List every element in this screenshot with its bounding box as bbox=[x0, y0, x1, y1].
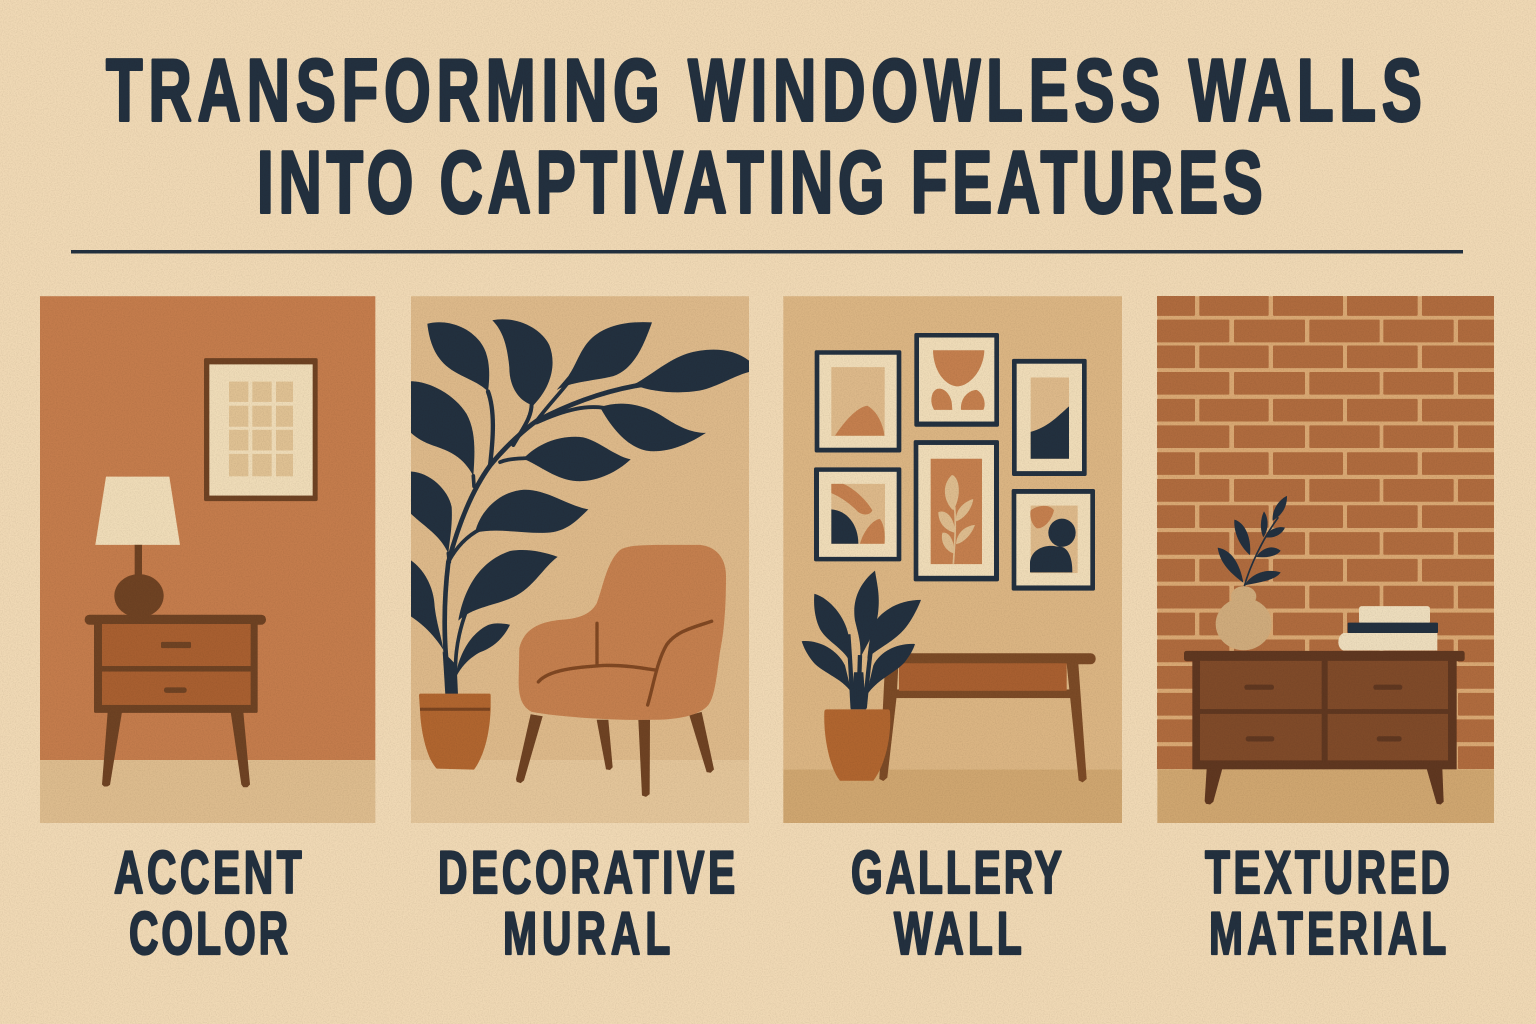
title: INTO CAPTIVATING FEATURES bbox=[257, 133, 1263, 231]
armchair bbox=[516, 545, 726, 797]
frame 2 bbox=[914, 333, 999, 427]
label: textured material: TEXTURED bbox=[1205, 839, 1450, 906]
frame 4 bbox=[814, 467, 901, 561]
nightstand bbox=[85, 615, 266, 787]
label: gallery wall: WALL bbox=[894, 900, 1022, 967]
label: textured material: MATERIAL bbox=[1209, 900, 1446, 967]
label: decorative mural: DECORATIVE bbox=[438, 839, 735, 906]
potted plant bbox=[802, 571, 921, 781]
panel: decorative mural bbox=[411, 296, 749, 824]
vase with branch bbox=[1216, 496, 1287, 650]
panel: gallery wall bbox=[783, 296, 1122, 824]
label: decorative mural bbox=[438, 839, 735, 967]
wall art frame bbox=[204, 358, 318, 501]
table lamp bbox=[95, 477, 180, 617]
brick wall bbox=[1143, 293, 1502, 769]
stacked books bbox=[1338, 606, 1438, 651]
frame 1 bbox=[815, 350, 901, 453]
title bbox=[106, 41, 1422, 231]
title: TRANSFORMING WINDOWLESS WALLS bbox=[106, 41, 1422, 139]
panel: accent color bbox=[40, 296, 375, 824]
console table bbox=[879, 653, 1096, 782]
label: accent color: ACCENT bbox=[114, 839, 302, 906]
frame 3 bbox=[1012, 359, 1087, 476]
panel: textured material bbox=[1143, 293, 1502, 824]
label: textured material bbox=[1205, 839, 1450, 967]
label: accent color bbox=[114, 839, 302, 967]
label: decorative mural: MURAL bbox=[503, 900, 670, 967]
frame 6 bbox=[1012, 489, 1095, 591]
frame 5 bbox=[914, 440, 999, 581]
dresser bbox=[1184, 651, 1465, 804]
plant pot bbox=[419, 694, 491, 770]
label: gallery wall bbox=[851, 839, 1062, 967]
mural plant bbox=[411, 319, 749, 695]
label: gallery wall: GALLERY bbox=[851, 839, 1062, 906]
label: accent color: COLOR bbox=[129, 900, 288, 967]
